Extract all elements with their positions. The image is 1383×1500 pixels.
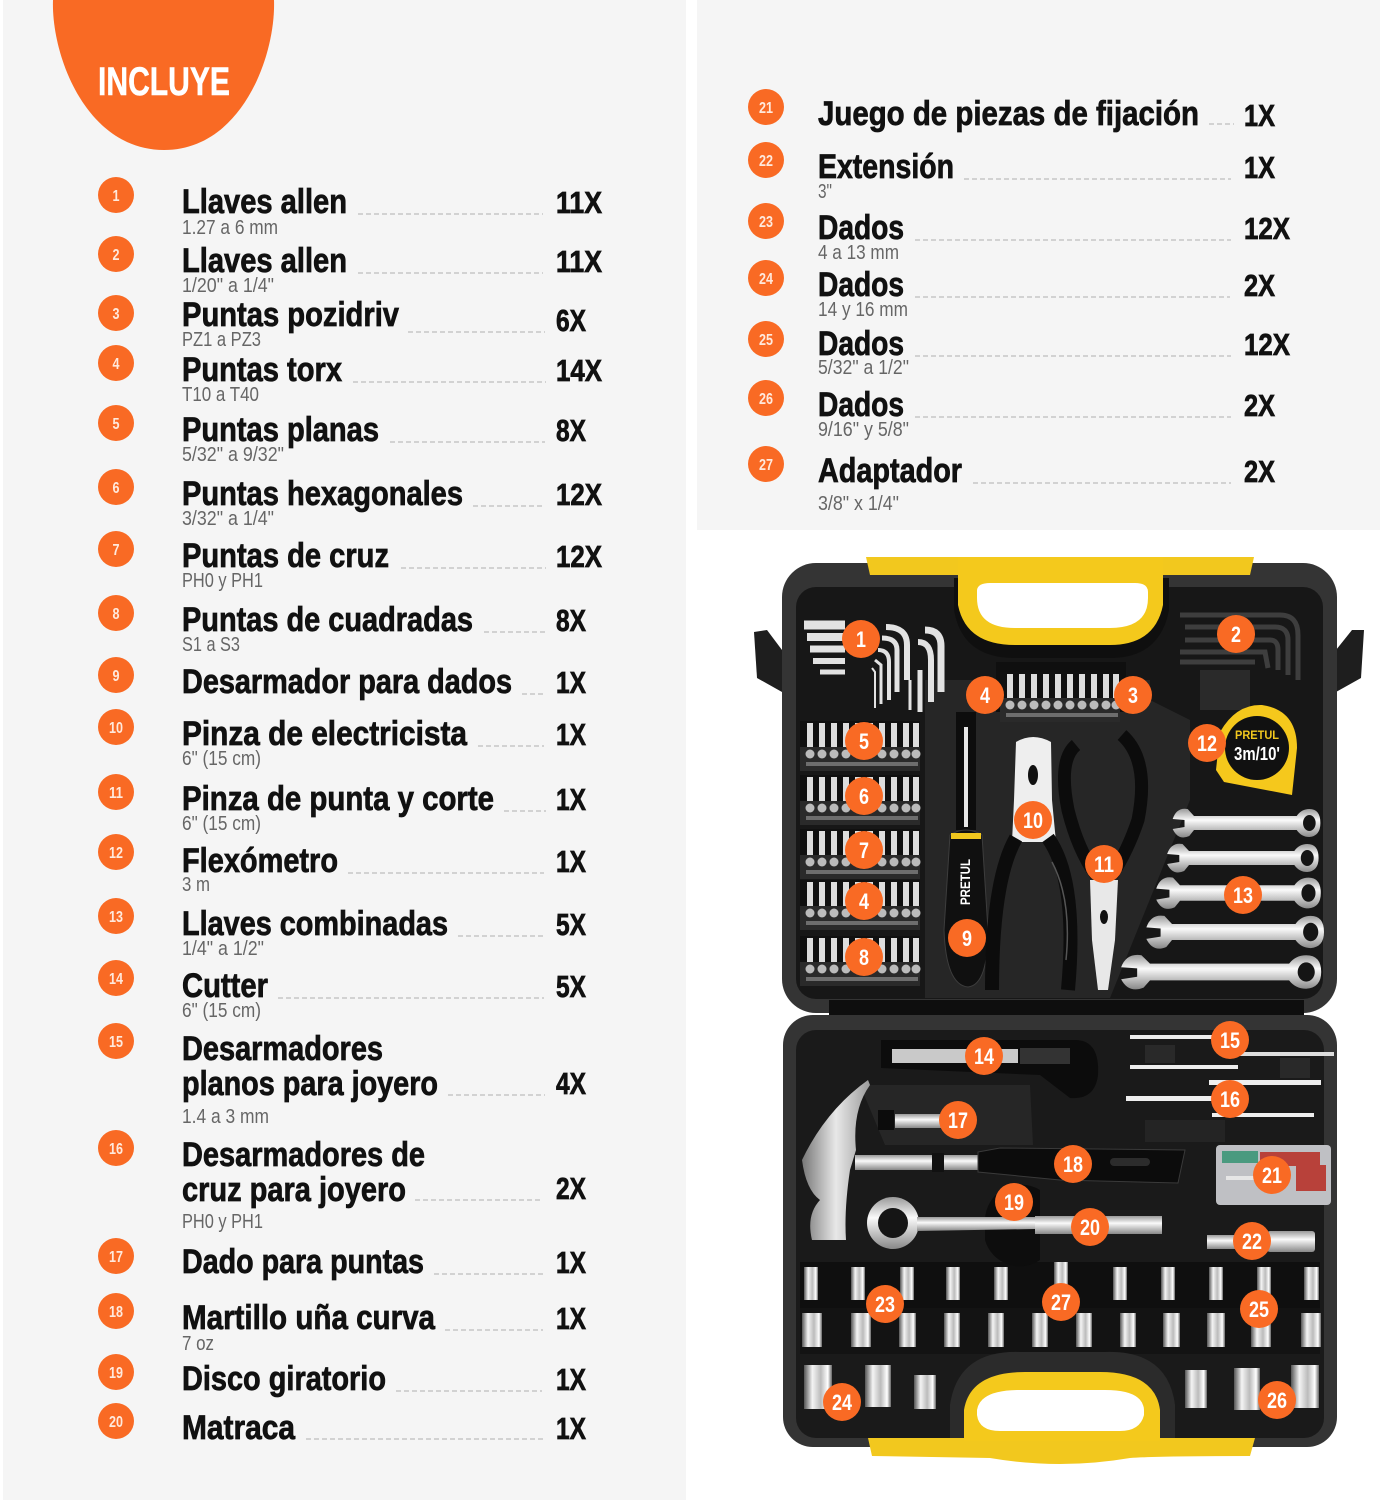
callout 18 [1054,1145,1092,1183]
item 11: Pinza de punta y corte [182,780,494,818]
callout 1 [842,620,880,658]
callout 4 top [966,676,1004,714]
item 18: Martillo uña curva [182,1299,436,1337]
yellow rim [868,1438,1255,1464]
callout 11 [1085,845,1123,883]
item 19 [98,1354,586,1398]
item 23: 12X [1244,211,1290,246]
item 21: 21 [759,100,773,117]
item 13: 1/4" a 1/2" [182,938,264,960]
callout 14 [965,1037,1003,1075]
callout 24 [823,1383,861,1421]
ratchet [867,1197,1162,1249]
item 13: 5X [556,907,586,942]
callout 9: 9 [962,926,972,951]
item 3: 6X [556,303,586,338]
callouts on toolbox [823,615,1296,1421]
coupler [878,1110,955,1130]
item 8 [98,595,586,656]
item 27: 27 [759,457,773,474]
callout 22 [1233,1222,1271,1260]
item 27: 3/8" x 1/4" [818,493,899,515]
item 23: Dados [818,209,904,247]
callout 17 [939,1101,977,1139]
item 14 [98,960,586,1022]
case shell [782,563,1337,1013]
callout 24: 24 [832,1390,853,1415]
item 2: 2 [112,247,120,264]
screwdriver: PRETUL [957,859,973,905]
cavity block [860,1085,1033,1145]
item 2: 1/20" a 1/4" [182,275,274,297]
item 1: 11X [556,185,602,220]
item 23: 4 a 13 mm [818,242,899,264]
handle [950,1352,1175,1438]
item 27: 2X [1244,454,1275,489]
bit tray 3 and 4 [996,662,1126,722]
item 4: 14X [556,353,602,388]
item 12: 3 m [182,874,210,896]
item 7: 12X [556,539,602,574]
toolbox: top half [754,557,1364,1013]
item 25: 5/32" a 1/2" [818,357,909,379]
item 6 [98,469,602,530]
item 17: 1X [556,1245,586,1280]
item 13: Llaves combinadas [182,905,448,943]
item 9 [98,657,586,701]
callout 19 [995,1183,1033,1221]
item 22: 22 [759,153,773,170]
callout 10: 10 [1023,808,1043,833]
item 5 [98,405,586,466]
item 23 [748,203,1290,264]
item 20: 1X [556,1411,586,1446]
item 5: 5/32" a 9/32" [182,444,284,466]
item 9: Desarmador para dados [182,663,512,701]
item 22: Extensión [818,148,954,186]
handle [954,578,1169,658]
callout 18: 18 [1063,1152,1083,1177]
callout 5 [845,722,883,760]
item 11: 1X [556,782,586,817]
allen keys inch [1180,615,1298,680]
callout 15: 15 [1220,1028,1240,1053]
callout 7: 7 [859,838,869,863]
callout 9 [948,919,986,957]
callout 6 [845,777,883,815]
callout 4 top: 4 [980,683,991,708]
callout 3 [1114,676,1152,714]
callout 17: 17 [948,1108,968,1133]
heading: INCLUYE badge: INCLUYE [98,60,230,104]
item 10: Pinza de electricista [182,715,468,753]
long nose pliers [1064,735,1142,990]
item 16: Desarmadores de [182,1136,425,1174]
item 11: 6" (15 cm) [182,813,261,835]
callout 26: 26 [1267,1388,1287,1413]
callout 13 [1224,876,1262,914]
item 8: Puntas de cuadradas [182,601,473,639]
item 2: Llaves allen [182,242,347,280]
item 3: Puntas pozidriv [182,296,399,334]
callout 1: 1 [856,627,866,652]
item 14: 6" (15 cm) [182,1000,261,1022]
callout 11: 11 [1094,852,1114,877]
cutter [881,1040,1098,1098]
callout 13: 13 [1233,883,1253,908]
callout 20: 20 [1080,1215,1100,1240]
item 16: 16 [109,1141,123,1158]
item 7: PH0 y PH1 [182,570,263,592]
item 3: PZ1 a PZ3 [182,329,261,351]
item 19: 19 [109,1365,123,1382]
item 21: 1X [1244,98,1275,133]
item 24: 14 y 16 mm [818,299,908,321]
fixing parts box [1216,1145,1331,1205]
hammer [802,1080,1185,1240]
item 18: 18 [109,1304,123,1321]
callout 15 [1211,1021,1249,1059]
item 5: 8X [556,413,586,448]
callout 21 [1253,1156,1291,1194]
item 22 [748,142,1275,203]
toolbox: hinge [829,1000,1304,1020]
item 8: 8X [556,603,586,638]
item 18: 1X [556,1301,586,1336]
item 1: 1.27 a 6 mm [182,217,278,239]
callout 3: 3 [1128,683,1138,708]
item 15: Desarmadores [182,1030,383,1068]
item 8: 8 [112,606,120,623]
item 23: 23 [759,214,773,231]
item 5: Puntas planas [182,411,379,449]
callout 27 [1042,1283,1080,1321]
item 6: 3/32" a 1/4" [182,508,274,530]
item 1: Llaves allen [182,183,347,221]
callout 23 [866,1285,904,1323]
item 12: Flexómetro [182,842,338,880]
item 20: Matraca [182,1409,296,1447]
item 19: Disco giratorio [182,1360,386,1398]
panel: left list background [3,0,686,1500]
item 4: Puntas torx [182,351,342,389]
item 25: Dados [818,325,904,363]
callout 2: 2 [1231,622,1241,647]
list: items 1 to 20 [98,177,602,1447]
item 10 [98,709,586,770]
item 2 [98,236,602,297]
item 27: Adaptador [818,452,962,490]
item 13 [98,898,586,960]
item 26: 9/16" y 5/8" [818,419,909,441]
callout 4 side [845,882,883,920]
item 15: 4X [556,1066,586,1101]
item 7: Puntas de cruz [182,537,389,575]
case shell [783,1015,1337,1447]
item 6: 12X [556,477,602,512]
item 10: 1X [556,717,586,752]
item 11 [98,774,586,835]
item 13: 13 [109,909,123,926]
sockets [802,1262,1321,1410]
item 24: 24 [759,271,773,288]
item 6: 6 [112,480,120,497]
tape measure: 3m/10' [1234,744,1280,764]
item 10: 6" (15 cm) [182,748,261,770]
jeweler screwdrivers [1126,1035,1334,1142]
item 22: 3" [818,181,832,203]
list: items 21 to 27 [748,89,1290,515]
item 25 [748,321,1290,379]
item 14: Cutter [182,967,268,1005]
disc [985,1185,1040,1266]
callout 14: 14 [974,1044,995,1069]
callout 2 [1217,615,1255,653]
item 5: 5 [112,416,120,433]
item 9: 1X [556,665,586,700]
item 7: 7 [112,542,120,559]
item 17 [98,1238,586,1281]
callout 25 [1240,1290,1278,1328]
item 16: cruz para joyero [182,1171,406,1209]
item 17: 17 [109,1249,123,1266]
yellow rim [866,557,1254,575]
item 14: 5X [556,969,586,1004]
item 25: 25 [759,332,773,349]
item 22: 1X [1244,150,1275,185]
allen keys metric [804,625,941,712]
item 12: 1X [556,844,586,879]
item 9: 9 [112,668,120,685]
item 26: Dados [818,386,904,424]
item 16: 2X [556,1171,586,1206]
item 15: planos para joyero [182,1065,438,1103]
item 20 [98,1403,586,1447]
item 1 [98,177,602,239]
item 8: S1 a S3 [182,634,240,656]
callout 16: 16 [1220,1087,1240,1112]
callout 12: 12 [1197,731,1217,756]
callout 23: 23 [875,1292,895,1317]
callout 22: 22 [1242,1229,1262,1254]
item 2: 11X [556,244,602,279]
callout 26 [1258,1381,1296,1419]
item 16 [98,1130,586,1233]
item 26 [748,380,1275,441]
callout 20 [1071,1208,1109,1246]
item 17: Dado para puntas [182,1243,424,1281]
side latches [754,630,782,692]
toolbox: bottom half [783,1015,1337,1464]
item 10: 10 [109,720,123,737]
callout 25: 25 [1249,1297,1269,1322]
item 26: 26 [759,391,773,408]
item 4: 4 [112,356,120,373]
tape measure [1216,705,1297,795]
callout 19: 19 [1004,1190,1024,1215]
item 27 [748,446,1275,515]
item 24: Dados [818,266,904,304]
wrenches [1121,809,1324,989]
item 3: 3 [112,306,120,323]
item 20: 20 [109,1414,123,1431]
item 4 [98,345,602,406]
item 4: T10 a T40 [182,384,259,406]
item 16: PH0 y PH1 [182,1211,263,1233]
screwdriver [944,712,988,987]
callout 8: 8 [859,945,869,970]
item 19: 1X [556,1362,586,1397]
callout 16 [1211,1080,1249,1118]
item 12 [98,834,586,896]
heading: INCLUYE badge [53,0,274,150]
item 15: 15 [109,1034,123,1051]
callout 5: 5 [859,729,869,754]
item 1: 1 [112,188,120,205]
callout 8 [845,938,883,976]
callout 7 [845,831,883,869]
callout 27: 27 [1051,1290,1071,1315]
item 6: Puntas hexagonales [182,475,463,513]
callout 4 side: 4 [859,889,870,914]
tape measure: PRETUL [1235,728,1279,742]
combination pliers [992,737,1070,990]
item 15: 1.4 a 3 mm [182,1106,269,1128]
item 18: 7 oz [182,1333,214,1355]
item 14: 14 [109,971,123,988]
callout 10 [1014,801,1052,839]
callout 6: 6 [859,784,869,809]
item 3 [98,295,586,351]
callout 12 [1188,724,1226,762]
item 18 [98,1293,586,1355]
item 7 [98,531,602,592]
bit rows 5 to 8 [800,721,920,986]
item 24: 2X [1244,268,1275,303]
item 25: 12X [1244,327,1290,362]
item 12: 12 [109,845,123,862]
item 21: Juego de piezas de fijación [818,95,1199,133]
extension [1207,1231,1315,1252]
item 24 [748,260,1275,321]
item 11: 11 [109,785,123,802]
item 26: 2X [1244,388,1275,423]
panel: right list background [697,0,1380,530]
callout 21: 21 [1262,1163,1282,1188]
item 15 [98,1023,586,1128]
